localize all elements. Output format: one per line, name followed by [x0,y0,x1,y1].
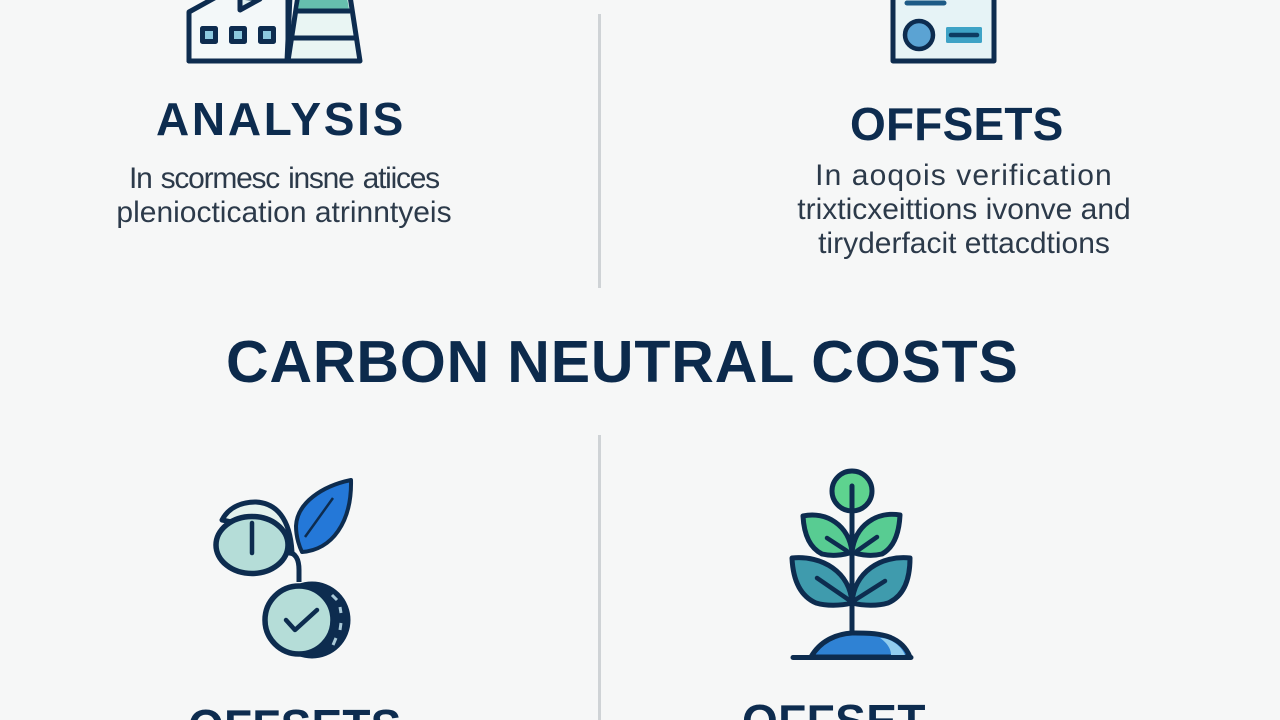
icon: factory with tower [189,0,360,61]
text: analysis description: In scormesc insne atiices [129,162,439,195]
title: CARBON NEUTRAL COSTS [226,329,1019,395]
icon: plant [792,471,911,658]
text: offsets description: trixticxeittions ivonve and [797,193,1131,226]
text: offsets description: In aoqois verification [815,159,1113,192]
text: analysis description: plenioctication atrinntyeis [116,196,452,229]
text: offsets description [797,159,1131,260]
heading: analysis: ANALYSIS [156,93,406,145]
text: analysis description [116,162,452,229]
icon: coins and leaf [216,480,351,656]
icon: certificate card [893,0,994,61]
text: offsets description: tiryderfacit ettacdtions [818,227,1110,260]
heading: offsets top: OFFSETS [850,98,1064,150]
